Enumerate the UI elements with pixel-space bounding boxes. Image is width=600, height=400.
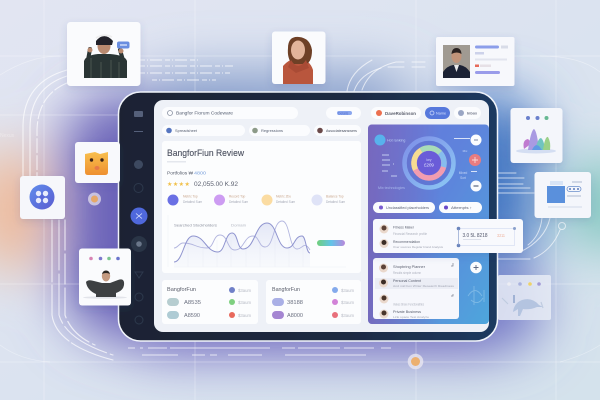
summary card left: BangforFun	[167, 287, 196, 293]
panel chips: Attempts ↑	[451, 206, 472, 210]
tablet bezel	[118, 92, 498, 341]
card: bird illustration	[498, 275, 551, 320]
line chart: Domain	[231, 223, 246, 227]
summary card right: $3aum	[341, 300, 355, 305]
gradient legend pill	[317, 240, 345, 246]
analytics panel: Mix technologies	[378, 186, 405, 190]
donut chart	[404, 138, 454, 188]
overlay stats card	[373, 219, 523, 253]
panel chips: Unclassified placeholders	[386, 206, 429, 210]
overlay stats card: 3211	[497, 233, 505, 238]
metrics row	[168, 194, 345, 206]
right controls: Sort	[460, 176, 466, 180]
card: woman portrait	[272, 32, 326, 84]
metrics row: Metric Top	[183, 194, 198, 198]
list card	[373, 258, 459, 319]
line chart	[168, 215, 346, 267]
card: logo	[20, 176, 65, 219]
profile photo	[443, 45, 470, 78]
search bar	[162, 107, 298, 119]
analytics panel	[368, 124, 489, 324]
decorative network icon	[468, 286, 484, 305]
metrics row: Balance Top	[326, 194, 344, 198]
list card: Private Business	[393, 310, 421, 314]
overlay stats card: Fitness Maker	[393, 224, 415, 230]
circuit lines: top right arcs	[347, 60, 425, 91]
metrics row: Detailed Sum	[326, 200, 345, 204]
circuit lines: top dashes	[140, 60, 233, 80]
analytics panel: Hot ranking	[387, 138, 405, 142]
plus button	[470, 262, 482, 273]
overlay stats card: Recommendation	[393, 240, 420, 244]
summary card left: $3aum	[238, 313, 252, 318]
title: BangforFiun Review	[167, 148, 244, 159]
user pills: Inbox	[467, 112, 478, 116]
speech badge	[117, 42, 130, 48]
star rating: ★★★★	[167, 181, 190, 188]
metrics row: Detailed Sum	[276, 200, 295, 204]
donut chart: £209	[424, 162, 434, 168]
filter chips: Regressions	[261, 129, 283, 133]
list card: Link space Test Analyze	[393, 315, 429, 319]
card: colorful chart	[510, 108, 562, 163]
list card: Values Share Functionalities	[393, 302, 424, 306]
header chip: Details	[338, 111, 349, 115]
metrics row: Detailed Sum	[229, 200, 248, 204]
summary card left: $3aum	[238, 300, 252, 305]
card: person with hat	[67, 22, 140, 86]
metrics row: Detailed Sum	[183, 200, 202, 204]
header chip	[326, 107, 361, 119]
right controls: Mix	[463, 149, 468, 153]
summary card left: A8590	[184, 313, 200, 319]
circuit lines: left	[23, 70, 113, 360]
metrics row: Metric Zbu	[276, 194, 291, 198]
card: man in suit profile	[436, 37, 514, 86]
donut chart: key	[427, 158, 432, 162]
summary card left	[162, 280, 258, 324]
summary card left: A8535	[184, 300, 201, 306]
left stat lines	[382, 155, 397, 176]
orange node bottom	[408, 354, 423, 369]
card: man with arms out	[79, 248, 131, 306]
summary card right: A8000	[287, 313, 303, 319]
user pills: Name	[436, 112, 446, 116]
panel chips	[373, 202, 482, 213]
rating value: 02,055.00 K.92	[194, 181, 239, 188]
sidebar icons	[130, 111, 148, 324]
user pills: DaveRobinson	[385, 111, 416, 117]
list card: Personal Content	[393, 279, 421, 283]
filter chips: Spreadsheet	[175, 129, 198, 133]
side label: Nexus	[0, 133, 15, 139]
summary card right: BangforFun	[272, 287, 300, 293]
user pills	[371, 107, 481, 119]
tablet device	[118, 92, 498, 341]
filter chips: Associatesanswers	[326, 129, 357, 133]
circuit lines: bottom dashes	[128, 348, 391, 355]
list card: Results simple column	[393, 271, 421, 275]
right controls	[454, 134, 482, 192]
overlay stats card: Financial Research profile	[393, 232, 427, 236]
summary card right: $3aum	[341, 313, 355, 318]
overlay stats card: 3.0 5L 8218	[462, 233, 488, 239]
card: emoji mascot	[75, 142, 120, 183]
card: device widget	[534, 172, 591, 218]
main review card	[162, 141, 361, 273]
orange node left	[88, 192, 101, 206]
overlay stats card: Over sources Regular brand Analysis	[393, 245, 443, 249]
summary card right: 38188	[287, 300, 303, 306]
summary card left: $3aum	[238, 288, 252, 293]
search bar: Bangfor Fiorum Codeware	[176, 111, 233, 116]
summary card right	[266, 280, 361, 324]
circuit lines: right side	[498, 173, 566, 259]
list card: Shopbring Planner	[393, 264, 426, 269]
summary card right: $3aum	[341, 288, 355, 293]
line chart: Searched Stockholders	[174, 223, 217, 227]
panel badge	[374, 134, 386, 146]
metrics row: Record Top	[229, 194, 245, 198]
portfolio label: Portfolios ₩	[167, 170, 193, 176]
list card: And mid box Writer Research Readiness	[393, 284, 455, 288]
right controls: Mixed	[459, 171, 467, 175]
tablet screen	[154, 100, 489, 332]
main review card: 4800	[194, 170, 206, 176]
filter chips	[162, 125, 361, 136]
